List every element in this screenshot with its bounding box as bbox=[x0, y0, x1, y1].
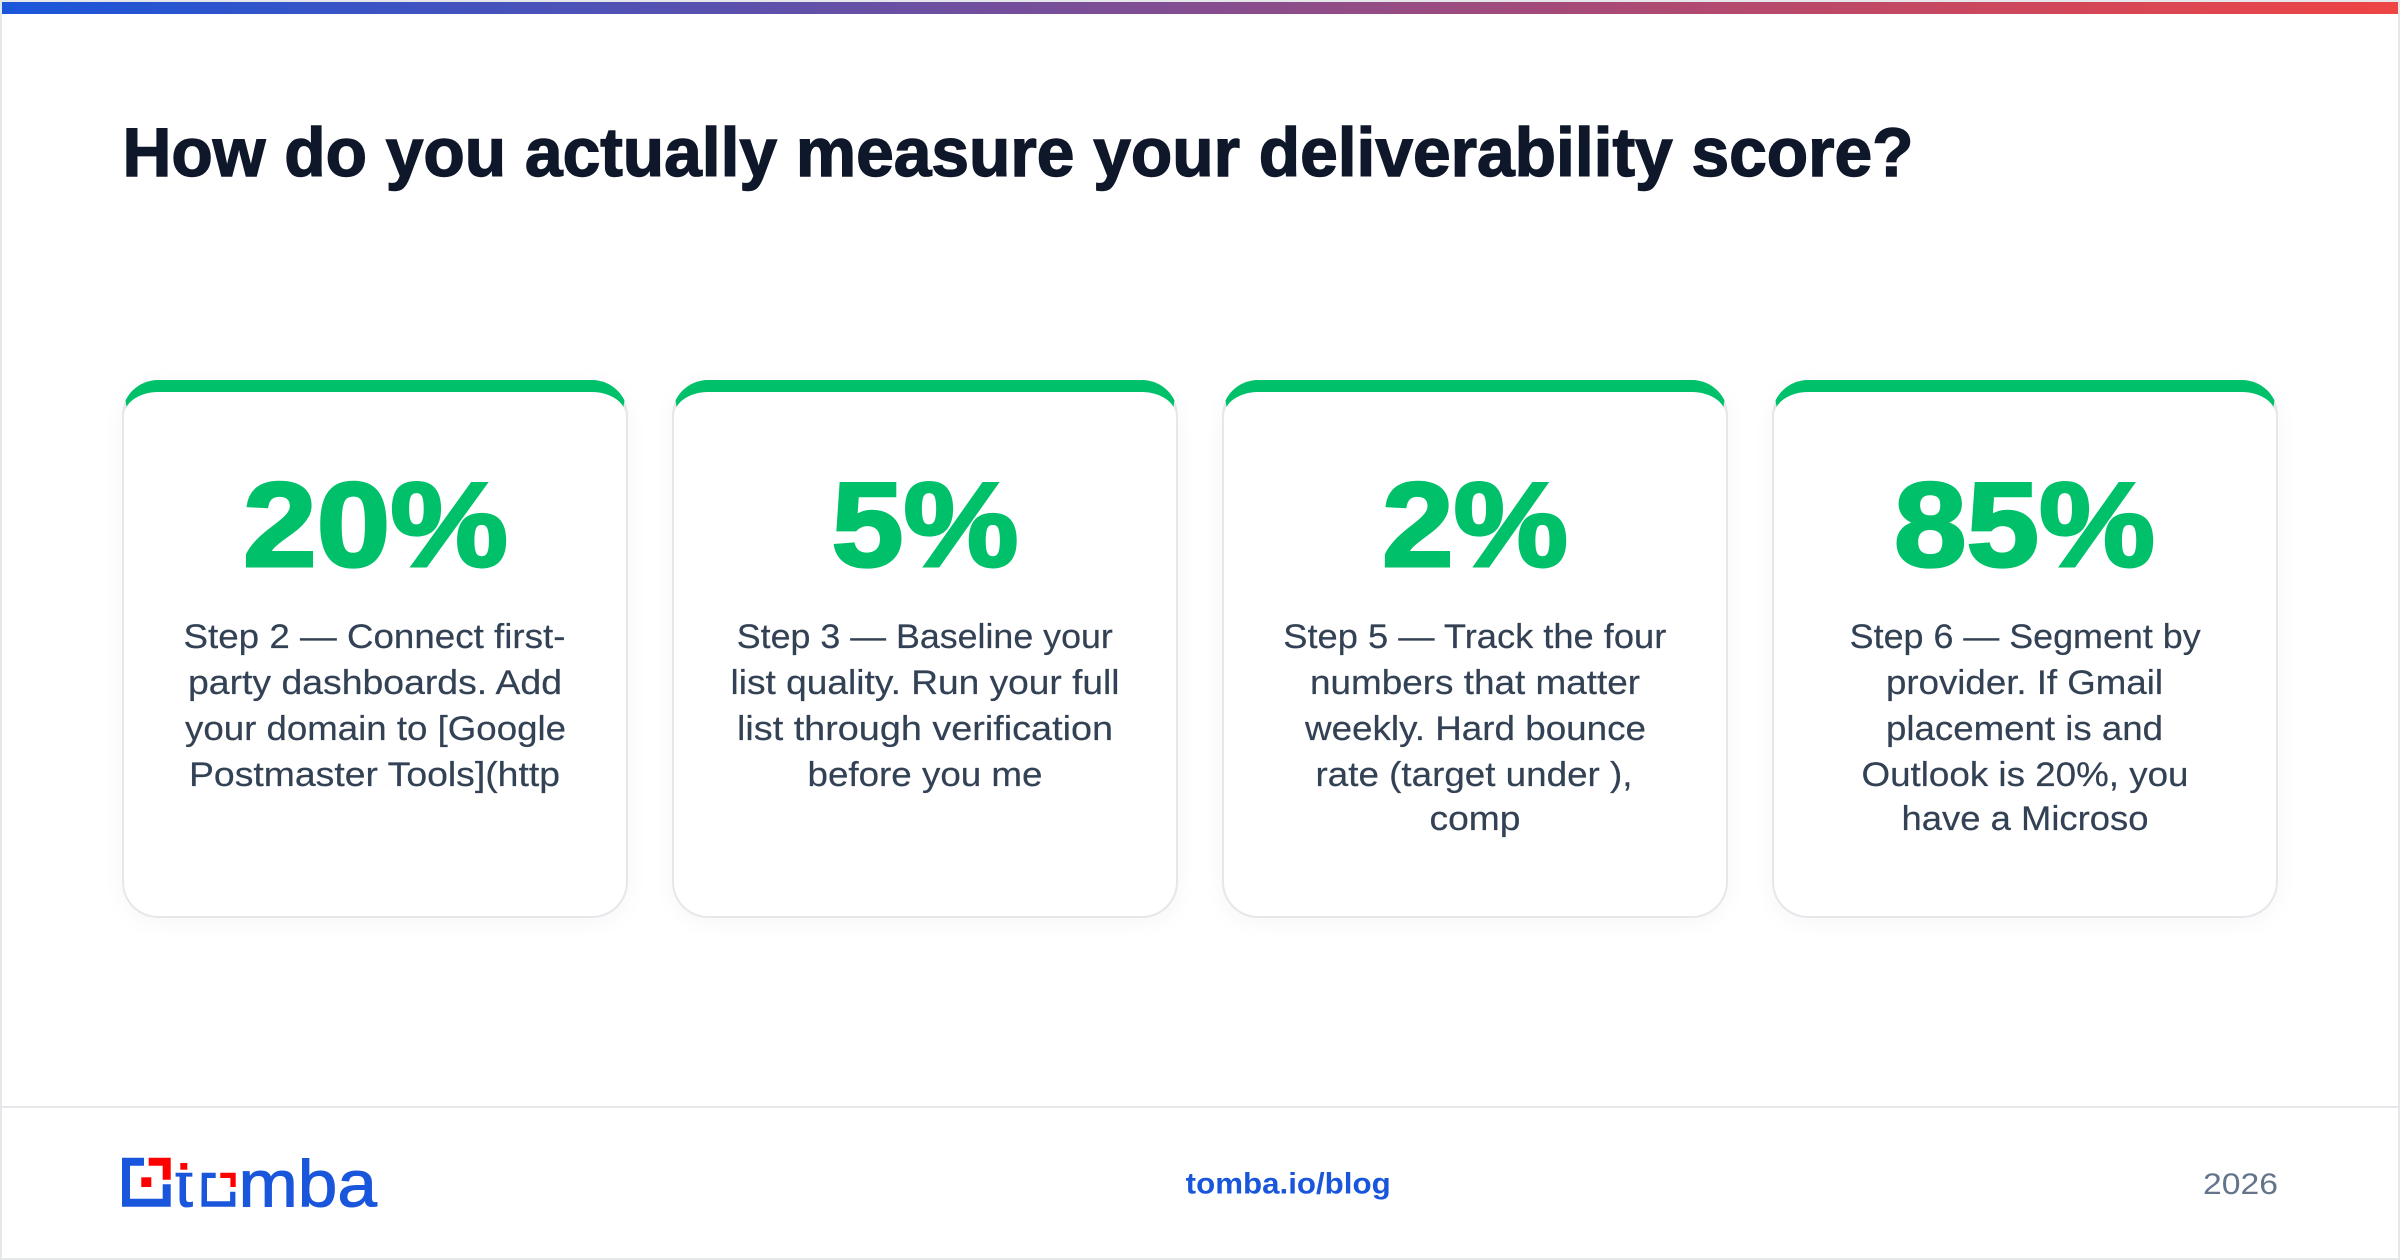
logo letters mba: mba bbox=[238, 1147, 377, 1221]
description: step 2: party dashboards. Add bbox=[188, 664, 562, 702]
description: step 6: have a Microso bbox=[1902, 800, 2148, 838]
stat: 85%: 85% bbox=[1894, 458, 2155, 592]
description: step 3: Step 3 — Baseline your bbox=[737, 618, 1113, 656]
description: step 5: numbers that matter bbox=[1310, 664, 1640, 702]
description: step 6: provider. If Gmail bbox=[1886, 664, 2163, 702]
description: step 2: Postmaster Tools](http bbox=[189, 756, 560, 794]
icon: red dot of logo t bbox=[180, 1163, 187, 1170]
description: step 3: before you me bbox=[808, 756, 1042, 794]
stat: 2%: 2% bbox=[1382, 458, 1568, 592]
description: step 6: Outlook is 20%, you bbox=[1862, 756, 2188, 794]
page text and footer graphics bbox=[122, 125, 2276, 1208]
footer link: tomba.io/blog bbox=[1186, 1167, 1391, 1200]
description: step 5: weekly. Hard bounce bbox=[1304, 710, 1646, 748]
description: step 3 bbox=[730, 618, 1120, 794]
stat: 5%: 5% bbox=[832, 458, 1018, 592]
panel: card 85% bbox=[1772, 380, 2278, 918]
description: step 5 bbox=[1283, 618, 1666, 838]
description: step 5: rate (target under ), bbox=[1316, 756, 1632, 794]
description: step 5: Step 5 — Track the four bbox=[1283, 618, 1666, 656]
description: step 2 bbox=[184, 618, 566, 794]
title: How do you actually measure your deliverability score? bbox=[122, 114, 1914, 191]
top gradient bar bbox=[2, 2, 2398, 14]
description: step 3: list quality. Run your full bbox=[730, 664, 1120, 702]
description: step 6: Step 6 — Segment by bbox=[1850, 618, 2201, 656]
panel: card 20% bbox=[122, 380, 628, 918]
stat: 20%: 20% bbox=[243, 458, 508, 592]
description: step 3: list through verification bbox=[737, 710, 1113, 748]
description: step 6 bbox=[1850, 618, 2201, 838]
logo: tomba bbox=[122, 1158, 378, 1208]
footer divider bbox=[2, 1106, 2398, 1108]
footer year: 2026 bbox=[2203, 1168, 2278, 1201]
panel: card 2% bbox=[1222, 380, 1728, 918]
panel: card 5% bbox=[672, 380, 1178, 918]
logo letter t: t bbox=[175, 1148, 193, 1221]
icon: logo square mark bbox=[122, 1158, 171, 1207]
icon: logo square o bbox=[201, 1173, 236, 1207]
description: step 2: your domain to [Google bbox=[185, 710, 566, 748]
description: step 2: Step 2 — Connect first- bbox=[184, 618, 566, 656]
description: step 6: placement is and bbox=[1886, 710, 2163, 748]
description: step 5: comp bbox=[1430, 800, 1520, 838]
